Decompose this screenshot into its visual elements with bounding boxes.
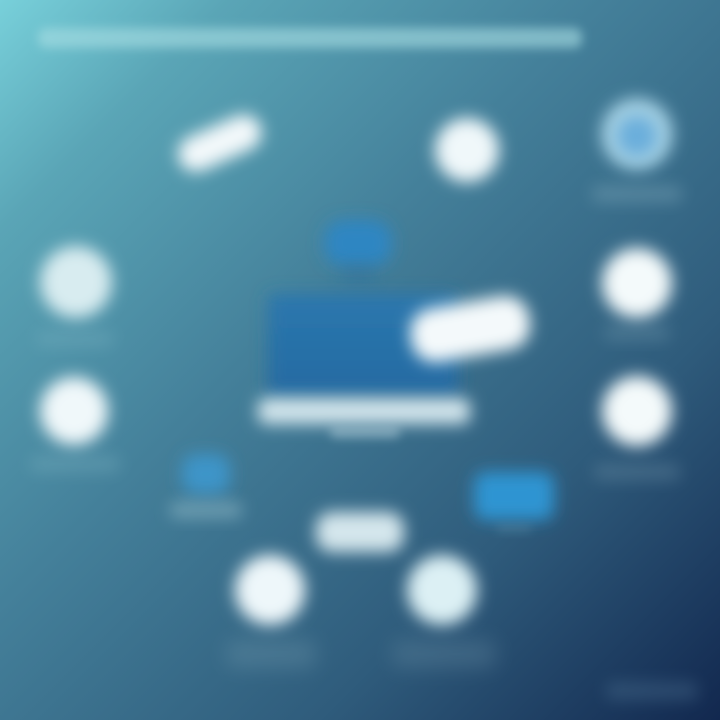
central figure: head [324,220,392,266]
footer mark [606,682,698,700]
node: left lower [30,377,120,472]
pill: top left [172,109,267,178]
icon: blue small left [170,454,242,518]
pill: bottom centre [316,512,404,552]
node: bottom left [226,555,316,668]
node: right lower [594,376,680,480]
node: bottom right [392,555,496,668]
central label bar [258,398,470,424]
pill: centre right [406,292,534,366]
node: top right [592,98,682,202]
central figure: neck [342,264,374,284]
central figure: monitor [268,294,458,396]
node: left upper [36,246,114,346]
circle: top centre [435,118,499,182]
node: right upper [602,248,672,340]
icon: blue small right [474,472,554,532]
title bar [38,28,582,48]
central sub label [330,426,400,438]
